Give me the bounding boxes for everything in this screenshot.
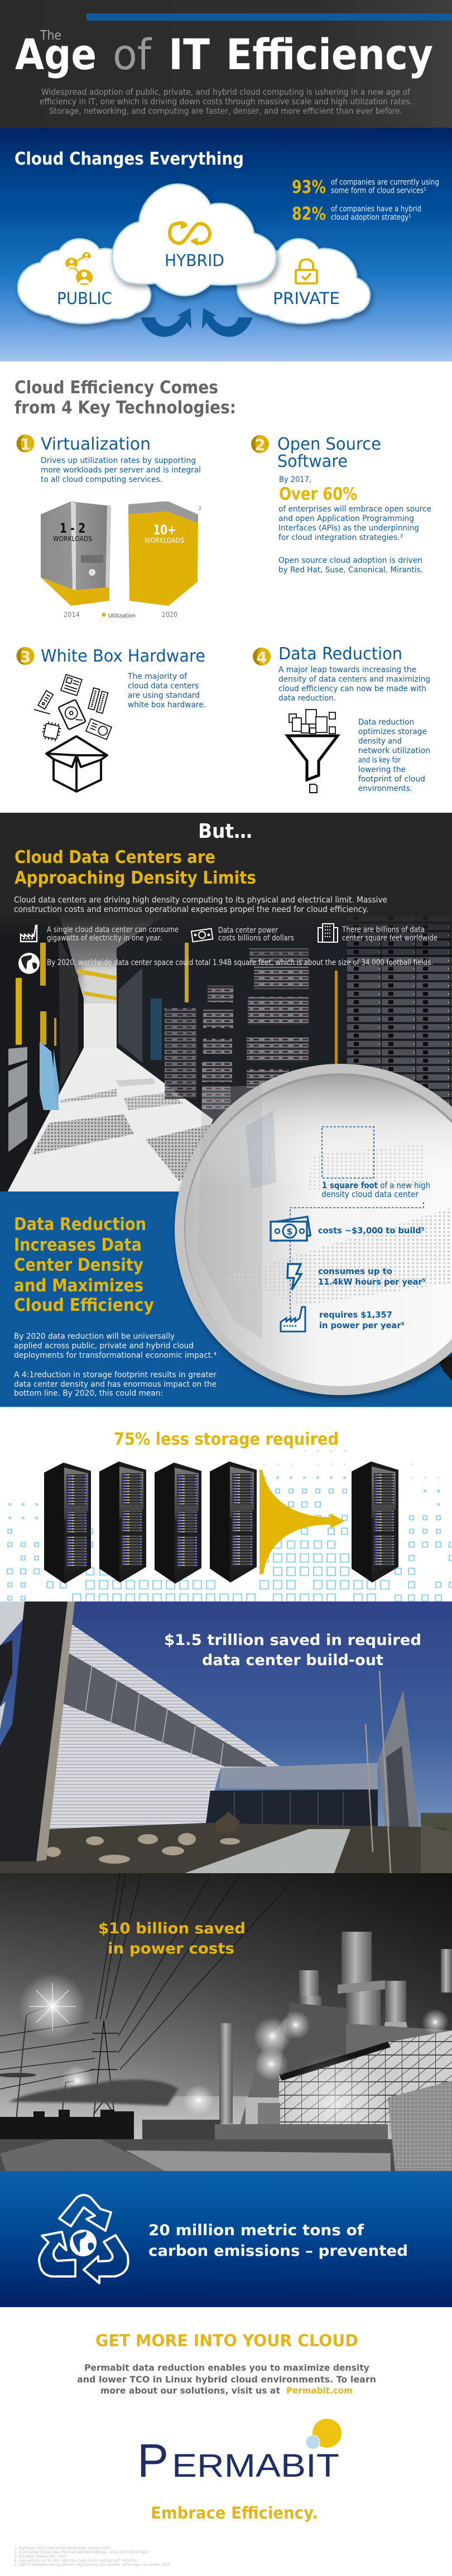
panel: four key technologies: [0, 361, 452, 813]
heading: data reduction increases density: [14, 1214, 154, 1315]
icon: recycling globe: [39, 2195, 128, 2283]
panel: call to action: [0, 2307, 452, 2576]
stat: 82 percent: [292, 203, 421, 224]
text: white box body: The majority of: [127, 672, 187, 681]
ground: [0, 1823, 452, 1873]
text: white box body: are using standard: [128, 691, 200, 700]
header description: [40, 87, 412, 116]
text: data reduction detail: and is key for: [358, 756, 401, 765]
technology 2: open source software: [251, 435, 431, 575]
badge 3: 3: [20, 648, 31, 666]
stat: 93 percent: 93%: [292, 176, 326, 197]
text: open source body: Open source cloud adoption is driven: [278, 556, 422, 565]
panel: less storage: [0, 1408, 452, 1605]
footnotes: 3. IDC press release, Dec. 2015: [15, 2554, 66, 2559]
chimneys: [219, 1932, 452, 2124]
text: one square foot: density cloud data center: [321, 1189, 419, 1199]
heading: data reduction increases density: Data Reduction: [14, 1214, 146, 1234]
logo: permabit: ERMABIT: [172, 2448, 339, 2484]
text: open source body: [278, 505, 431, 575]
stat: cost to build: [271, 1217, 425, 1241]
panel: carbon emissions: [0, 2171, 452, 2307]
magnifier handle: [438, 1355, 452, 1381]
text: white box body: [127, 672, 206, 710]
pylon: [91, 2020, 118, 2117]
text: one square foot: 1 square foot of a new high: [322, 1180, 430, 1190]
server tower 2014: 1 - 2: [60, 520, 85, 536]
badge 4: [253, 648, 271, 667]
text: data reduction detail: optimizes storage: [358, 727, 427, 736]
fact: electricity: gigawatts of electricity in one year.: [47, 934, 162, 943]
badge 4: 4: [256, 648, 267, 667]
text: call to action: Permabit.com: [286, 2385, 353, 2396]
distant horizon: [421, 1813, 452, 1873]
header description: Storage, networking, and computing are faster, denser, and more efficient than ever before.: [49, 106, 402, 116]
text: data reduction body: cloud efficiency can now be made with: [278, 684, 426, 693]
clouds: [8, 2080, 179, 2106]
stat: 82 percent: cloud adoption strategy¹: [331, 213, 411, 222]
magnifying glass: [175, 1064, 452, 1395]
heading: density limits: Cloud Data Centers are: [15, 847, 215, 867]
text: data reduction body: density of data centers and maximizing: [278, 675, 430, 684]
badge 2: [251, 435, 269, 454]
text: 1.5 trillion: $1.5 trillion saved in required: [164, 1632, 421, 1649]
stat: power consumption: 11.4kW hours per year⁵: [318, 1277, 426, 1287]
right wall structure: [378, 1690, 421, 1845]
text: 10 billion: $10 billion saved: [98, 1920, 246, 1937]
heading: cloud efficiency: from 4 Key Technologies:: [15, 398, 236, 418]
footnotes: 4. Assumptions are 4x data reduction. Data center cost per sq/ft =$3,000.: [15, 2558, 137, 2563]
top fade into dark: [0, 909, 452, 943]
heading: cloud efficiency: Cloud Efficiency Comes: [15, 378, 218, 398]
heading: data reduction increases density: Increases Data: [14, 1235, 142, 1255]
text: 20 million metric tons: [148, 2222, 408, 2260]
arrow: reduction funnel: [259, 1470, 345, 1574]
server tower 2014: [41, 501, 111, 606]
young trees: [366, 1671, 391, 1873]
label: hybrid: HYBRID: [165, 251, 224, 270]
dashed connector: [290, 1202, 424, 1319]
street lamps: [13, 1973, 93, 2155]
text: data reduction detail: [358, 718, 430, 793]
fact: worldwide space: [18, 953, 433, 974]
heading: data reduction increases density: Cloud Efficiency: [14, 1295, 154, 1315]
cloud: public: [18, 239, 151, 324]
fence: [388, 2081, 452, 2171]
heading: density limits: Approaching Density Limits: [15, 868, 256, 888]
text: open source body: of enterprises will embrace open source: [278, 505, 431, 514]
text: by 2017: By 2017,: [279, 475, 311, 484]
panel: data center density limits: [0, 813, 452, 1192]
title: Age of IT Efficiency: IT: [169, 30, 210, 79]
text: data reduction detail: lowering the: [358, 765, 406, 774]
badge 1: [17, 435, 35, 454]
text: 10 billion: [98, 1920, 246, 1957]
text: data reduction body: data reduction.: [278, 694, 336, 703]
text: data reduction explanation: By 2020 data reduction will be universally: [14, 1332, 175, 1341]
chart legend: utilization: 2020: [162, 611, 177, 619]
text: data reduction body: [278, 665, 430, 703]
stat: 93 percent: [292, 176, 439, 197]
header accent bar: [86, 13, 452, 21]
text: data reduction detail: footprint of cloud: [358, 775, 425, 784]
server tower 2020: [128, 501, 201, 606]
heading: 75 percent less storage: 75% less storage required: [114, 1430, 339, 1449]
fact: power costs: [191, 926, 294, 943]
text: but: But…: [198, 820, 252, 843]
header description: efficiency in IT, one which is driving down costs through massive scale and high utilization rates.: [40, 97, 412, 107]
cloud: hybrid: [112, 184, 276, 296]
tagline: embrace efficiency: Embrace Efficiency.: [151, 2503, 318, 2522]
stat: cost to build: costs ~$3,000 to build⁵: [318, 1226, 425, 1236]
footnotes: [15, 2546, 170, 2567]
title: Age of IT Efficiency: Age: [15, 30, 97, 79]
heading: white box hardware: White Box Hardware: [41, 647, 205, 666]
text: call to action: [77, 2362, 376, 2396]
photo: power plant: [0, 1873, 452, 2171]
badge 3: [17, 647, 35, 666]
chart legend: utilization: 2014: [64, 611, 80, 619]
icon: funnel with documents: [287, 710, 338, 793]
badge 1: 1: [20, 435, 31, 454]
text: 1.5 trillion: data center build-out: [202, 1652, 383, 1669]
label: public: PUBLIC: [57, 289, 112, 308]
server tower 2020: 2: [199, 506, 201, 511]
header description: Widespread adoption of public, private, and hybrid cloud computing is ushering in a new age of: [41, 87, 411, 97]
heading: open source software: Open Source: [277, 435, 381, 454]
stat: 82 percent: 82%: [292, 203, 326, 224]
heading: data reduction increases density: Center Density: [14, 1255, 143, 1275]
text: density intro: construction costs and enormous operational expenses propel the need for cloud efficiency.: [14, 904, 368, 914]
heading: data reduction: Data Reduction: [278, 644, 402, 664]
fact: electricity: [21, 925, 179, 943]
heading: cloud changes everything: Cloud Changes Everything: [15, 149, 244, 169]
text: data reduction detail: density and: [358, 737, 402, 746]
fact: electricity: A single cloud data center can consume: [47, 925, 179, 934]
dashed one square foot outline: [322, 1127, 374, 1178]
photo: data center building: [0, 1601, 452, 1873]
corrugated wall: [47, 1624, 280, 1829]
text: virtualization body: [41, 456, 201, 484]
heading: virtualization: Virtualization: [41, 435, 151, 454]
left racks: [0, 913, 84, 1192]
stat: power cost: in power per year⁵: [319, 1320, 405, 1330]
text: call to action: more about our solutions, visit us at: [100, 2385, 280, 2396]
text: virtualization body: Drives up utilization rates by supporting: [41, 456, 196, 465]
floor: [7, 1048, 213, 1192]
right racks: [117, 913, 347, 1120]
text: density intro: Cloud data centers are driving high density computing to its physical and electrical limit. Massive: [14, 895, 387, 905]
heading: data reduction increases density: and Maximizes: [14, 1276, 143, 1296]
fact: power costs: Data center power: [218, 926, 278, 935]
icon: padlock: [296, 259, 317, 283]
text: 10 billion: in power costs: [108, 1940, 234, 1957]
title: Age of IT Efficiency: [15, 30, 433, 79]
text: virtualization body: to all cloud computing services.: [41, 475, 162, 484]
title: Age of IT Efficiency: of: [113, 30, 152, 79]
entrance roof and glass: [219, 1763, 378, 1789]
server rack after: [352, 1461, 398, 1583]
text: data reduction detail: network utilization: [358, 746, 430, 755]
stat: power cost: [281, 1307, 405, 1332]
stat: cost to build: $: [286, 1226, 293, 1237]
text: data reduction explanation: deployments for transformational economic impact.⁴: [14, 1351, 217, 1360]
power lines: [0, 1873, 300, 2089]
text: data reduction explanation: data center density and has enormous impact on the: [14, 1380, 217, 1389]
heading: cloud efficiency: [15, 378, 236, 418]
technology 3: white box hardware: [17, 647, 206, 792]
landscaping rocks: [45, 1812, 240, 1864]
fact: power costs: costs billions of dollars: [218, 934, 294, 943]
text: 20 million metric tons: carbon emissions – prevented: [148, 2242, 408, 2260]
text: call to action: and lower TCO in Linux hybrid cloud environments. To learn: [77, 2374, 376, 2385]
title: The: The: [40, 28, 61, 43]
title: Age of IT Efficiency: Efficiency: [226, 30, 433, 79]
text: open source body: for cloud integration strategies.³: [278, 533, 403, 542]
logo: permabit: [137, 2419, 342, 2487]
stat: power consumption: [287, 1264, 426, 1290]
heading: density limits: [15, 847, 256, 888]
logo: permabit: P: [137, 2434, 169, 2487]
skyline and ground: [0, 2110, 452, 2171]
dark pillar: [0, 1601, 68, 1861]
text: data reduction explanation: applied across public, private and hybrid cloud: [14, 1342, 194, 1350]
server tower 2020: WORKLOADS: [145, 537, 184, 544]
text: white box body: white box hardware.: [128, 701, 206, 710]
photo: data center corridor: [0, 909, 452, 1192]
text: open source body: and open Application Programming: [278, 514, 414, 523]
arrows: public and private feed hybrid: [141, 308, 253, 337]
footnotes: 1. RightScale 2015 state of the cloud report, January 2015: [15, 2546, 110, 2550]
text: virtualization body: more workloads per server and is integral: [41, 466, 201, 475]
stat: over 60 percent: Over 60%: [279, 484, 357, 504]
text: 20 million metric tons: 20 million metric tons of: [148, 2222, 364, 2239]
heading: open source software: [277, 435, 381, 471]
fact: square feet: [318, 924, 437, 943]
ceiling: [59, 913, 167, 1008]
panel: cloud changes everything: [0, 128, 452, 361]
plant body: [183, 2003, 452, 2153]
panel: data reduction blue: [0, 1191, 452, 1408]
heading: get more into your cloud: GET MORE INTO YOUR CLOUD: [95, 2331, 358, 2350]
technology 1: virtualization: [17, 435, 201, 619]
text: data reduction detail: Data reduction: [358, 718, 414, 727]
background square pattern: [3, 1444, 452, 1605]
stat: 82 percent: of companies have a hybrid: [331, 205, 421, 214]
technology 4: data reduction: [253, 644, 430, 793]
stat: power cost: requires $1,357: [319, 1310, 392, 1320]
server tower 2014: WORKLOADS: [53, 535, 92, 543]
server tower 2020: 10+: [153, 522, 176, 538]
panel: header: [0, 0, 452, 128]
server racks before: [44, 1461, 257, 1584]
icon: hardware parts and open box: [34, 674, 112, 792]
heading: open source software: Software: [277, 452, 348, 471]
text: open source body: by Red Hat, Suse, Canonical, Mirantis.: [278, 566, 423, 575]
icon: public network: [65, 252, 93, 285]
chart legend: utilization: Utilization: [108, 613, 136, 619]
footnotes: 5. Intel IT: Extremely Energy-Efficient, High-Density Data Centers, White Paper December, 2015: [15, 2563, 170, 2567]
badge 2: 2: [254, 436, 266, 454]
text: data reduction explanation: bottom line. By 2020, this could mean:: [14, 1389, 163, 1398]
text: data reduction explanation: [14, 1332, 217, 1398]
text: data reduction body: A major leap towards increasing the: [278, 665, 416, 674]
chart legend: utilization: [64, 611, 177, 619]
stat: 93 percent: some form of cloud services¹: [331, 186, 426, 195]
cloud: private: [237, 239, 370, 324]
text: open source body: Interfaces (APIs) as the underpinning: [278, 524, 419, 533]
label: private: PRIVATE: [273, 289, 340, 308]
fact: square feet: There are billions of data: [342, 925, 425, 934]
text: data reduction detail: environments.: [358, 784, 412, 793]
footnotes: 2. Cisco Global Cloud Index: Forecast and Methodology , 2014-2019 White Paper: [15, 2550, 149, 2555]
text: density intro: [14, 895, 387, 914]
icon: hybrid infinity: [170, 221, 210, 246]
text: data reduction explanation: A 4:1reduction in storage footprint results in greater: [14, 1371, 217, 1379]
text: 1.5 trillion: [164, 1632, 421, 1669]
stat: power consumption: consumes up to: [318, 1266, 392, 1276]
text: one square foot: [321, 1180, 430, 1199]
text: call to action: Permabit data reduction enables you to maximize density: [84, 2362, 370, 2373]
text: white box body: cloud data centers: [128, 682, 199, 691]
